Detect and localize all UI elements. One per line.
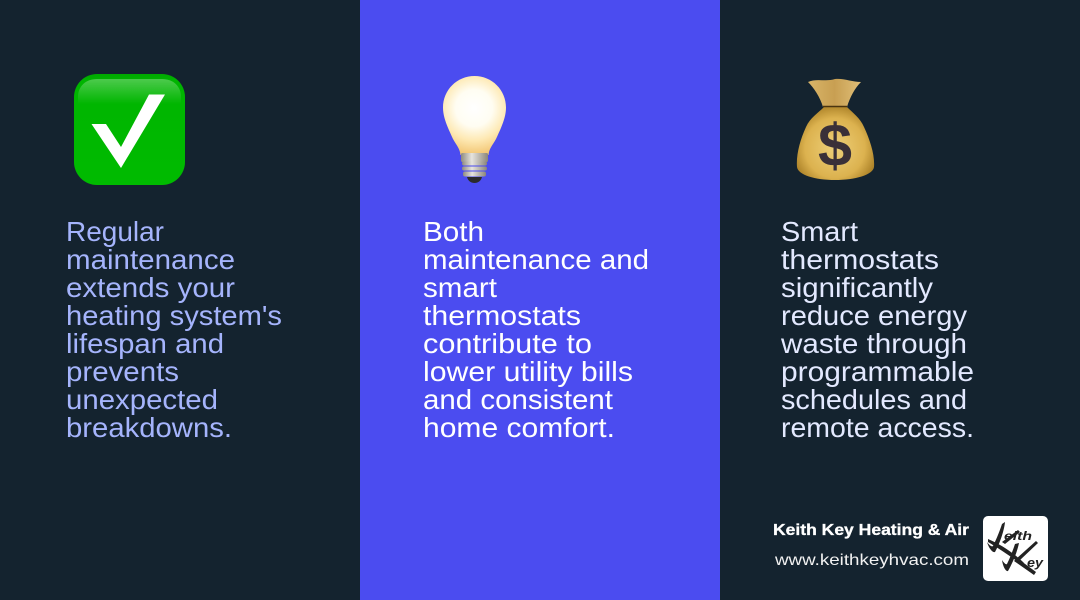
text block: left (66, 216, 282, 443)
panel: left background (0, 0, 360, 600)
panel: right background (720, 0, 1080, 600)
text block: centre: lower utility bills (423, 356, 633, 387)
text block: right: reduce energy (781, 300, 967, 331)
text block: left: Regular (66, 216, 164, 247)
text block: left: lifespan and (66, 328, 224, 359)
text block: left: extends your (66, 272, 235, 303)
text block: right: waste through (780, 328, 967, 359)
text block: right: programmable (781, 356, 974, 387)
text block: centre: thermostats (423, 300, 581, 331)
icon: green check mark (74, 74, 185, 185)
text block: right: thermostats (781, 244, 939, 275)
text block: left: prevents (66, 356, 179, 387)
footer: company name: Keith Key Heating & Air (773, 522, 969, 539)
icon: light bulb (443, 76, 506, 183)
text block: left: heating system's (66, 300, 282, 331)
text block: centre: smart (423, 272, 497, 303)
logo: Keith Key: eith (1004, 529, 1032, 543)
text block: centre: maintenance and (423, 244, 649, 275)
icon: money bag (797, 79, 874, 180)
panel: centre background (360, 0, 720, 600)
footer: website: www.keithkeyhvac.com (774, 552, 969, 569)
text block: right: Smart (781, 216, 858, 247)
logo: Keith Key: ey (1027, 555, 1044, 570)
text block: right: schedules and (781, 384, 967, 415)
text block: centre: home comfort. (423, 412, 615, 443)
icon: money bag: $ (818, 112, 852, 179)
text block: centre: contribute to (423, 328, 592, 359)
text block: centre: Both (423, 216, 484, 247)
text block: right: significantly (781, 272, 933, 303)
text block: right (780, 216, 974, 443)
text block: centre: and consistent (423, 384, 613, 415)
text block: centre (423, 216, 649, 443)
logo: Keith Key (983, 516, 1048, 581)
text block: left: maintenance (66, 244, 235, 275)
text block: left: breakdowns. (66, 412, 232, 443)
text block: left: unexpected (66, 384, 218, 415)
text block: right: remote access. (781, 412, 974, 443)
